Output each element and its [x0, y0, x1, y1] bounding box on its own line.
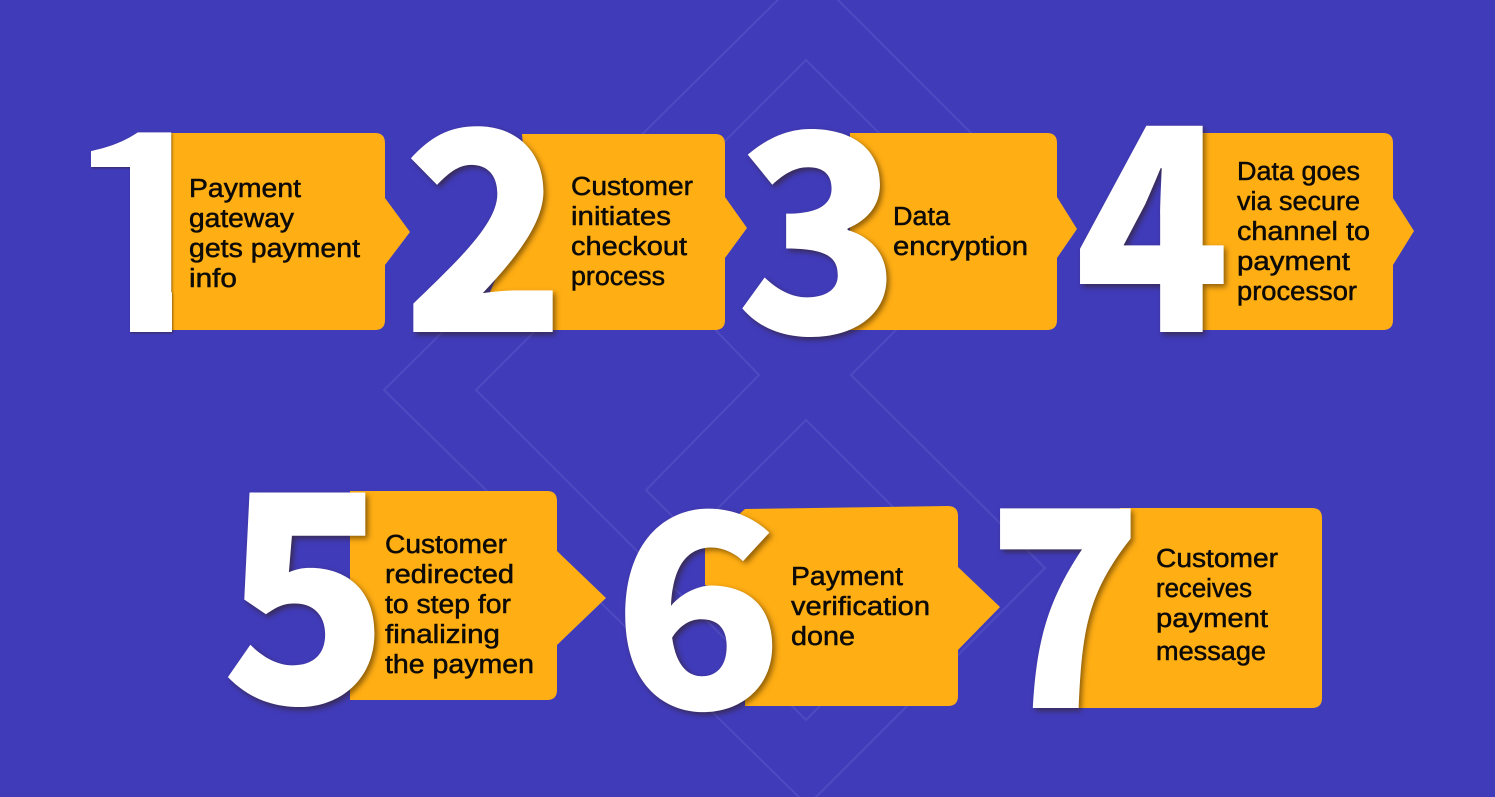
step 3 — [736, 13, 1077, 413]
text: step 1: Payment — [189, 175, 301, 203]
text: step 7: receives — [1156, 575, 1252, 603]
text: step 2: Customer — [571, 173, 694, 201]
text: step 2: initiates — [571, 203, 671, 231]
text: step 6: Payment — [791, 563, 903, 591]
panel: step 5 — [350, 491, 606, 700]
panel: step 6 — [705, 506, 1000, 706]
text: step 2: checkout — [571, 233, 687, 261]
step 7 — [987, 389, 1322, 788]
text: step 7: Customer — [1156, 545, 1279, 573]
text: step 4: channel to — [1237, 218, 1370, 246]
number 2: 2 — [402, 9, 566, 412]
text: step 2: process — [571, 263, 665, 291]
text: step 1: gateway — [189, 205, 294, 233]
panel: step 1 — [165, 133, 410, 330]
text: step 3: encryption — [893, 233, 1028, 261]
text: step 5: to step for — [385, 591, 512, 619]
step 1 — [90, 132, 410, 334]
panel: step 2 — [490, 134, 747, 330]
step 6 — [612, 396, 1000, 787]
text: step 5: finalizing — [385, 621, 500, 649]
number 6: 6 — [612, 396, 783, 787]
text: step 6: done — [791, 623, 855, 651]
step 2 — [402, 9, 747, 412]
number 7: 7 — [987, 389, 1143, 788]
text: step 5: Customer — [385, 531, 508, 559]
text: step 4: processor — [1237, 278, 1358, 306]
number 1: 1 — [66, 14, 221, 412]
text: step 1: info — [189, 265, 237, 293]
step 4 — [1074, 2, 1414, 414]
step 5 — [221, 367, 606, 787]
text: step 5: redirected — [385, 561, 514, 589]
text: step 4: Data goes — [1237, 158, 1360, 186]
number 4: 4 — [1074, 2, 1230, 414]
text: step 3: Data — [893, 203, 951, 231]
number 3: 3 — [736, 13, 901, 413]
text: step 4: payment — [1237, 248, 1350, 276]
panel: step 4 — [1195, 133, 1414, 330]
text: step 6: verification — [791, 593, 930, 621]
text: step 1: gets payment — [189, 235, 360, 263]
text: step 4: via secure — [1237, 188, 1360, 216]
panel: step 3 — [850, 133, 1077, 330]
text: step 7: payment — [1156, 605, 1268, 633]
panel: step 7 — [1062, 508, 1322, 708]
text: step 5: the paymen — [385, 651, 534, 679]
number 5: 5 — [221, 367, 390, 787]
text: step 7: message — [1156, 638, 1266, 666]
